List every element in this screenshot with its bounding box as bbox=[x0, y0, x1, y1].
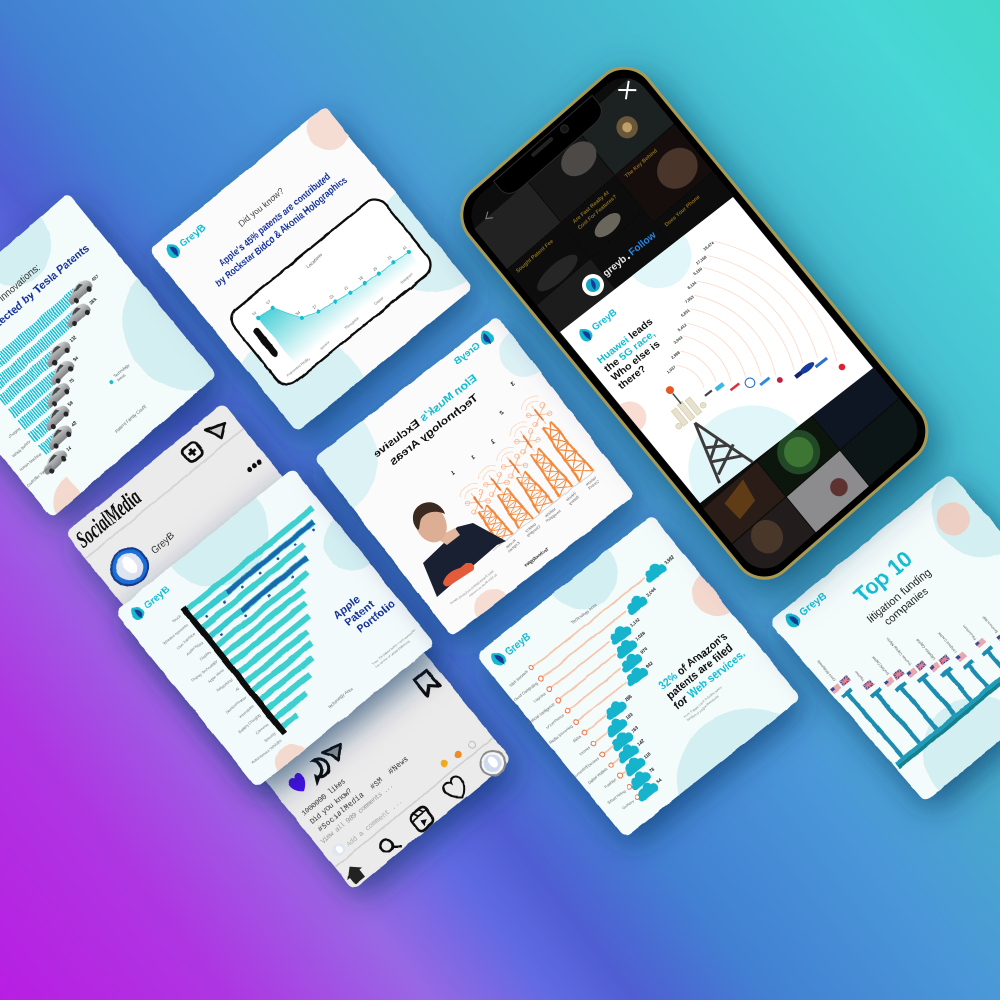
chart: lollipops with clouds: 288 bbox=[624, 694, 633, 703]
chart: lollipops with clouds: Drones bbox=[579, 746, 591, 756]
logo: GreyB bbox=[452, 340, 483, 368]
area chart: 21 bbox=[343, 285, 349, 291]
bar chart: technology areas: Wireless Networks bbox=[162, 623, 189, 646]
heading: Apple Patent Portfolio: Patent bbox=[343, 598, 377, 629]
logo bbox=[163, 220, 209, 261]
chart: towers: Rocket bbox=[504, 538, 517, 549]
bar chart: technology areas: Battery Charging bbox=[237, 713, 262, 734]
heading: Apple Patent Portfolio: Apple bbox=[331, 593, 363, 622]
chart: arcs: 2,988 bbox=[670, 349, 681, 360]
avatar bbox=[103, 541, 155, 593]
chart: lollipops with clouds: 142 bbox=[636, 738, 646, 746]
brand marks bbox=[704, 317, 847, 446]
heading: Huawei: Huawei leads bbox=[595, 316, 656, 366]
bar chart: technology areas: User Interface bbox=[176, 632, 197, 650]
area chart: 25 bbox=[372, 266, 378, 272]
poster: Huawei 5G race bbox=[560, 197, 873, 503]
chart: striped bars with cars: 42 bbox=[70, 420, 78, 427]
chart: arcs: 5,412 bbox=[676, 322, 688, 332]
chart: columns: Therium Capital Mgmt bbox=[886, 637, 912, 667]
area chart: Hologram bbox=[400, 272, 414, 285]
chart: towers: Vehicle bbox=[565, 491, 577, 502]
heading: Huawei: the 5G race, bbox=[602, 328, 658, 375]
area chart: 21 bbox=[387, 255, 393, 261]
bar chart: technology areas: Cameras bbox=[255, 723, 270, 736]
panel: Amazon card bbox=[474, 514, 819, 857]
chart: lollipops with clouds: Cloud Computing bbox=[513, 681, 538, 702]
area chart: 27 bbox=[311, 304, 317, 309]
logo bbox=[450, 328, 496, 369]
panel: Elon Musk mirrored card bbox=[310, 315, 654, 656]
bar chart: technology areas: Apple Music bbox=[207, 668, 226, 684]
legend: Technology bbox=[113, 364, 130, 379]
heading: Huawei: Who else is bbox=[609, 339, 663, 383]
footnote: Note: Patent count includes patent bbox=[683, 686, 723, 719]
chart: lollipops with clouds: 3,044 bbox=[645, 587, 657, 598]
bar chart: technology areas: Security bbox=[263, 731, 277, 743]
chart: towers: Battery bbox=[525, 523, 537, 533]
chart: arcs: 17,168 bbox=[695, 254, 708, 266]
area chart: Locations bbox=[305, 252, 324, 269]
chart: lollipops with clouds: 978 bbox=[639, 647, 649, 655]
story header: greyb bbox=[601, 254, 629, 279]
panel: Apple Patent Portfolio card bbox=[112, 469, 450, 808]
heading: Huawei bbox=[595, 316, 677, 392]
heading: did you know: Did you know? bbox=[236, 186, 285, 228]
chart: striped bars with cars: 94 bbox=[72, 354, 80, 362]
heading: Apple Patent Portfolio: Portfolio bbox=[354, 598, 398, 636]
chart: lollipops with clouds: Digital Wallets bbox=[587, 767, 608, 785]
chart: lollipops with clouds bbox=[498, 550, 784, 827]
bar chart: technology areas bbox=[149, 504, 415, 765]
footnote: Note: The patent family count represents bbox=[371, 628, 417, 666]
chart: striped bars with cars: 58 bbox=[67, 400, 75, 408]
chart: striped bars with cars: Vehicle Battery bbox=[11, 439, 32, 458]
area chart: 18 bbox=[358, 276, 364, 281]
close icon bbox=[618, 81, 636, 99]
chart: towers: Technologies bbox=[523, 546, 550, 568]
heading: Amazon title: patents are filed bbox=[664, 642, 735, 702]
chart: towers: Navigation bbox=[545, 509, 562, 523]
chart: striped bars with cars: Controller Systems bbox=[26, 464, 52, 488]
bar chart: technology areas: Semiconductor bbox=[225, 695, 248, 714]
logo: GreyB bbox=[503, 631, 533, 658]
chart: lollipops with clouds: Grocery bbox=[622, 799, 635, 811]
icon: more dots bbox=[246, 459, 263, 473]
area chart: 31 bbox=[402, 245, 408, 251]
footnote: Note: Patent families exclusively owned bbox=[449, 569, 495, 606]
logo bbox=[128, 582, 173, 623]
figure: portrait with car bbox=[409, 500, 506, 597]
heading: Elon Musk's Exclusive: Elon Musk's Exclusive bbox=[371, 373, 479, 460]
chart: lollipops with clouds: Web Services bbox=[509, 670, 529, 687]
chart: columns: Burford Capital bbox=[871, 655, 890, 676]
chart: towers: 1 bbox=[490, 438, 497, 446]
post caption: View all 989 comments ... bbox=[320, 781, 396, 846]
chart: towers: Control bbox=[588, 479, 600, 490]
chart: lollipops with clouds: 78 bbox=[648, 766, 656, 773]
post caption: #SocialMedia #SM #News bbox=[317, 755, 411, 834]
post caption: Did you know? bbox=[309, 787, 354, 827]
chart: lollipops with clouds: Alexa bbox=[572, 734, 583, 744]
chart: lollipops with clouds: 942 bbox=[645, 660, 654, 669]
axis label: Patent Family Count bbox=[114, 403, 148, 434]
story header bbox=[582, 230, 659, 296]
chart: lollipops with clouds: 163 bbox=[630, 725, 640, 734]
chart: towers: 1 bbox=[450, 470, 457, 478]
bar chart: technology areas: Autonomous Vehicles bbox=[251, 738, 282, 765]
feed captions: Cost For Features? bbox=[577, 194, 619, 231]
chart: lollipops with clouds: Media Streaming bbox=[549, 724, 574, 745]
chart: lollipops with clouds: 54 bbox=[655, 777, 663, 784]
chart: columns: Parabellum bbox=[962, 624, 977, 640]
footnote: families of unique inventions. bbox=[686, 694, 720, 722]
feed captions: Sought Patent Fee bbox=[515, 239, 555, 275]
icon: share bbox=[322, 740, 347, 765]
phone feed thumbnails bbox=[472, 78, 918, 568]
chart: towers: Vehicle bbox=[545, 507, 557, 518]
chart: lollipops with clouds: 183 bbox=[625, 712, 634, 720]
chart: lollipops with clouds: Smart Home bbox=[607, 789, 626, 805]
footnote: by Elon Musk as inventor. bbox=[467, 573, 498, 598]
heading: Top 10: Top 10 bbox=[849, 546, 917, 608]
icon: search bbox=[378, 833, 402, 858]
heading: Apple Patent Portfolio bbox=[331, 578, 398, 642]
logo bbox=[783, 588, 830, 630]
icon: new post bbox=[181, 440, 204, 464]
chart: striped bars with cars: 14 bbox=[65, 445, 73, 452]
axis label: Technology Area bbox=[326, 686, 354, 709]
post caption bbox=[299, 738, 429, 861]
icon: home bbox=[342, 861, 368, 887]
chart: towers: 1 bbox=[469, 454, 477, 462]
chart: columns: Bentham IMF bbox=[981, 614, 999, 634]
footnote: the number of unique inventions. bbox=[374, 638, 411, 669]
chart: lollipops with clouds: 118 bbox=[643, 751, 652, 759]
phone notch bbox=[494, 96, 607, 199]
logo: GreyB bbox=[142, 584, 172, 612]
feed captions: The Key Behind bbox=[624, 148, 659, 180]
bar chart: technology areas: Wearables bbox=[238, 704, 255, 719]
icon: phone pill bbox=[252, 326, 280, 359]
chart: striped bars with cars: 283 bbox=[89, 296, 98, 305]
logo bbox=[489, 628, 534, 669]
emoji row bbox=[439, 737, 477, 771]
chart: striped bars with cars: 75 bbox=[69, 377, 76, 385]
chart: towers: 3 bbox=[509, 380, 516, 388]
icon: heart outline bbox=[441, 774, 470, 804]
chart: striped bars with cars: Charging bbox=[7, 427, 21, 440]
area chart: 23 bbox=[328, 295, 334, 300]
chart: lollipops with clouds: Fashion bbox=[604, 778, 617, 789]
chart: arcs: 8,124 bbox=[686, 280, 698, 290]
legend: Areas bbox=[116, 373, 126, 383]
feed captions: Are Fast Really At bbox=[572, 190, 611, 225]
area chart: Sensor bbox=[319, 340, 331, 351]
panel: Top 10 card bbox=[766, 470, 1000, 824]
chart: towers bbox=[418, 373, 617, 578]
chart: lollipops with clouds: Logistics bbox=[533, 691, 547, 704]
area chart: Display bbox=[373, 296, 385, 306]
back chevron bbox=[483, 212, 493, 222]
icon: like heart bbox=[286, 771, 311, 796]
notch camera bbox=[530, 123, 570, 160]
heading: Apple title: by Rockstar Bidco & Akonia Holographics bbox=[214, 175, 350, 289]
chart: lollipops with clouds: Artificial Intelligence bbox=[527, 702, 556, 726]
story header: Follow bbox=[627, 230, 659, 258]
chart: towers: Engines bbox=[507, 541, 520, 553]
chart: towers: Battery bbox=[568, 495, 580, 506]
panel: social media post frame bbox=[65, 403, 513, 893]
chart: towers: Vehicle bbox=[585, 476, 597, 486]
heading: Amazon title: 32% of Amazon's bbox=[656, 630, 730, 692]
chart: lollipops with clouds: 3,992 bbox=[663, 554, 676, 565]
icon: bookmark bbox=[414, 670, 440, 696]
chart: lollipops with clouds: 1,142 bbox=[629, 617, 641, 628]
feed captions bbox=[515, 146, 701, 323]
chart: columns bbox=[810, 519, 1000, 769]
chart: lollipops with clouds: eCommerce bbox=[546, 713, 565, 729]
chart: columns: Harbour bbox=[853, 669, 865, 682]
panel: Apple 45% card bbox=[148, 104, 490, 450]
chart: arcs: 19,474 bbox=[702, 240, 716, 252]
chart: arcs: 3,943 bbox=[673, 334, 684, 345]
feed captions: Does Your Phone bbox=[664, 194, 701, 228]
chart: columns: Omni Bridgeway bbox=[816, 659, 837, 682]
panel: Tesla patents card bbox=[0, 194, 233, 538]
area chart: Augmented Reality bbox=[286, 356, 311, 378]
area chart: 34 bbox=[295, 310, 302, 316]
bar chart: technology areas: Display bbox=[199, 650, 211, 661]
heading: Amazon title: for Web services. bbox=[672, 648, 748, 712]
bar chart: technology areas: Audio/Video bbox=[185, 641, 204, 657]
subheading: litigation funding bbox=[865, 566, 934, 626]
chart: towers: 2 bbox=[497, 409, 505, 417]
area chart: 52 bbox=[252, 311, 258, 317]
post caption: 1000000 likes bbox=[301, 777, 348, 818]
chart: lollipops with clouds: Connected Devices bbox=[572, 757, 600, 780]
chart: columns: Litigation Capital bbox=[915, 638, 936, 661]
avatar nav bbox=[476, 746, 510, 781]
logo: GreyB bbox=[590, 307, 619, 333]
logo bbox=[576, 305, 621, 344]
chart: striped bars with cars: 132 bbox=[69, 334, 78, 344]
axis heading: Technology Area bbox=[570, 602, 598, 625]
poster blobs bbox=[560, 235, 824, 503]
area chart: 57 bbox=[265, 300, 271, 306]
legend bbox=[108, 364, 133, 387]
chart: arcs: 7,553 bbox=[684, 294, 695, 304]
heading: Amazon title bbox=[656, 629, 748, 712]
heading: Elon Musk's Exclusive: Technology Areas bbox=[387, 392, 480, 468]
chart: towers: Charging bbox=[526, 525, 541, 538]
post caption: Add a comment ... bbox=[345, 798, 405, 849]
chart: striped bars with cars bbox=[0, 270, 174, 491]
icon: send bbox=[205, 417, 231, 443]
account name: GreyB bbox=[149, 531, 177, 556]
phone outline frame bbox=[226, 194, 436, 390]
chart: striped bars with cars: 457 bbox=[91, 273, 100, 282]
heading: Apple title: Apple's 45% patents are contributed bbox=[217, 171, 333, 269]
area chart bbox=[240, 207, 424, 378]
bar chart: technology areas: Display Technology bbox=[191, 659, 219, 683]
phone mockup bbox=[449, 55, 940, 591]
heading: SocialMedia wordmark: SocialMedia bbox=[71, 484, 146, 553]
icon: comment bbox=[306, 755, 332, 781]
chart: arcs: 1,937 bbox=[666, 364, 677, 374]
chart: arcs: 6,831 bbox=[680, 307, 691, 318]
logo: GreyB bbox=[798, 591, 829, 619]
chart: lollipops with clouds: 1,028 bbox=[634, 630, 646, 642]
heading: Huawei: there? bbox=[616, 364, 649, 392]
illustration: cell tower bbox=[651, 375, 753, 486]
chart: columns: Longford Capital bbox=[937, 631, 958, 654]
area chart: Waveguide bbox=[344, 316, 360, 330]
icon: reels bbox=[409, 806, 435, 833]
subheading: companies bbox=[882, 585, 931, 628]
bar chart: technology areas: AI bbox=[235, 686, 240, 692]
bar chart: technology areas: Touch bbox=[172, 614, 182, 624]
bar chart: technology areas: Networking bbox=[216, 678, 233, 693]
avatar small bbox=[330, 841, 347, 858]
logo: GreyB bbox=[178, 222, 208, 250]
chart: striped bars with cars: Human Machine bbox=[20, 452, 42, 473]
chart: arcs: 9,150 bbox=[692, 266, 704, 276]
chart: arcs bbox=[618, 218, 849, 446]
